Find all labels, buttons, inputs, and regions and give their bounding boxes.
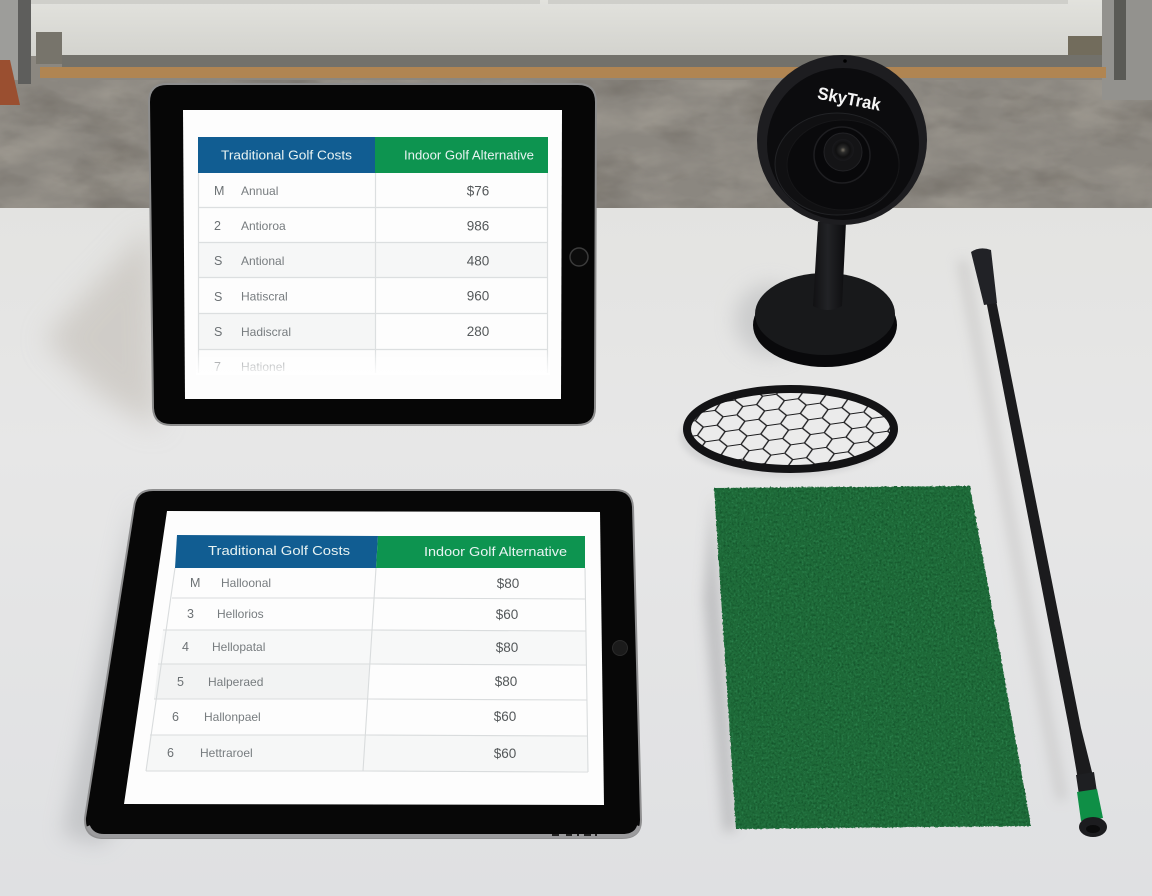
tablet top shadow xyxy=(45,225,158,430)
camera base xyxy=(753,273,897,367)
net mesh xyxy=(692,393,890,465)
table rows: S xyxy=(214,254,222,268)
home button xyxy=(570,248,588,266)
turf shadow xyxy=(704,490,736,832)
concrete floor xyxy=(0,80,1152,208)
club shadow xyxy=(962,260,1062,800)
table rows: 5 xyxy=(177,675,184,689)
table rows: Hettraroel xyxy=(200,746,253,760)
wooden threshold xyxy=(40,67,1106,78)
table rows: Hellorios xyxy=(217,607,264,621)
camera shadow xyxy=(735,284,805,356)
garage door xyxy=(30,0,1102,56)
header: traditional xyxy=(175,535,378,568)
tablet bottom shadow xyxy=(62,495,140,845)
club shaft xyxy=(986,300,1093,780)
camera housing xyxy=(757,55,927,225)
header: traditional: Traditional Golf Costs xyxy=(208,544,350,558)
table rows: 480 xyxy=(467,254,489,268)
turf mat xyxy=(714,486,1031,829)
table rows: 4 xyxy=(182,640,189,654)
table rows: $60 xyxy=(494,709,516,724)
table rows: Antioroa xyxy=(241,219,286,233)
table rows: 6 xyxy=(172,710,179,724)
camera face ring xyxy=(775,113,899,215)
table rows: Annual xyxy=(241,184,278,198)
SkyTrak logo: SkyTrak xyxy=(816,83,883,115)
tablet body xyxy=(149,84,596,425)
table rows: 986 xyxy=(467,218,489,234)
table rows: $60 xyxy=(494,746,516,761)
table rows: Halperaed xyxy=(208,675,263,689)
table: bottom tablet xyxy=(146,535,588,772)
table rows: S xyxy=(214,325,222,339)
speaker grille xyxy=(552,834,597,836)
tablet: top xyxy=(149,84,596,425)
club tip xyxy=(1079,817,1107,837)
table rows: 280 xyxy=(467,324,489,339)
club grip xyxy=(971,248,997,305)
hitting net xyxy=(683,385,898,473)
table rows: Hallonpael xyxy=(204,710,261,724)
desk surface xyxy=(0,208,1152,896)
tablet body xyxy=(85,490,641,838)
net shadow xyxy=(680,397,890,477)
SkyTrak camera xyxy=(753,55,927,367)
table rows: $80 xyxy=(495,674,517,689)
table rows: $60 xyxy=(496,607,518,622)
header: alternative: Indoor Golf Alternative xyxy=(424,545,567,559)
club collar xyxy=(1076,772,1097,795)
table rows: Hatiscral xyxy=(241,290,288,304)
table rows: S xyxy=(214,290,222,304)
camera stem xyxy=(813,222,846,310)
header: traditional: Traditional Golf Costs xyxy=(221,148,352,162)
table rows: Hationel xyxy=(241,360,285,374)
table rows: 2 xyxy=(214,219,221,233)
table rows xyxy=(146,568,588,772)
table rows: $80 xyxy=(496,640,518,655)
green band xyxy=(1077,789,1103,821)
table rows: 7 xyxy=(214,360,221,374)
screen xyxy=(124,511,604,805)
screen xyxy=(183,110,562,399)
sensor dot xyxy=(843,59,847,63)
table rows: $76 xyxy=(467,184,489,198)
header: alternative: Indoor Golf Alternative xyxy=(404,148,534,162)
table rows: 960 xyxy=(467,288,489,304)
camera lens xyxy=(814,127,870,183)
header: alternative xyxy=(376,536,585,568)
table rows: $80 xyxy=(497,576,519,591)
net rim xyxy=(687,389,894,469)
table rows: 3 xyxy=(187,607,194,621)
table: top tablet xyxy=(196,137,550,375)
door bracket right xyxy=(1068,36,1102,64)
table rows: M xyxy=(190,576,200,590)
table rows: M xyxy=(214,184,224,198)
table rows xyxy=(196,173,550,375)
garage background xyxy=(0,0,1152,208)
home button xyxy=(612,640,628,656)
header: traditional xyxy=(198,137,375,173)
tablet: bottom xyxy=(85,490,641,838)
door bracket left xyxy=(36,32,62,64)
table rows: Hadiscral xyxy=(241,325,291,339)
golf alignment club xyxy=(962,248,1107,837)
header: alternative xyxy=(375,137,548,173)
table rows: Halloonal xyxy=(221,576,271,590)
table rows: Antional xyxy=(241,254,284,268)
table rows: 6 xyxy=(167,746,174,760)
table rows: Hellopatal xyxy=(212,640,265,654)
door seal xyxy=(62,55,1102,67)
